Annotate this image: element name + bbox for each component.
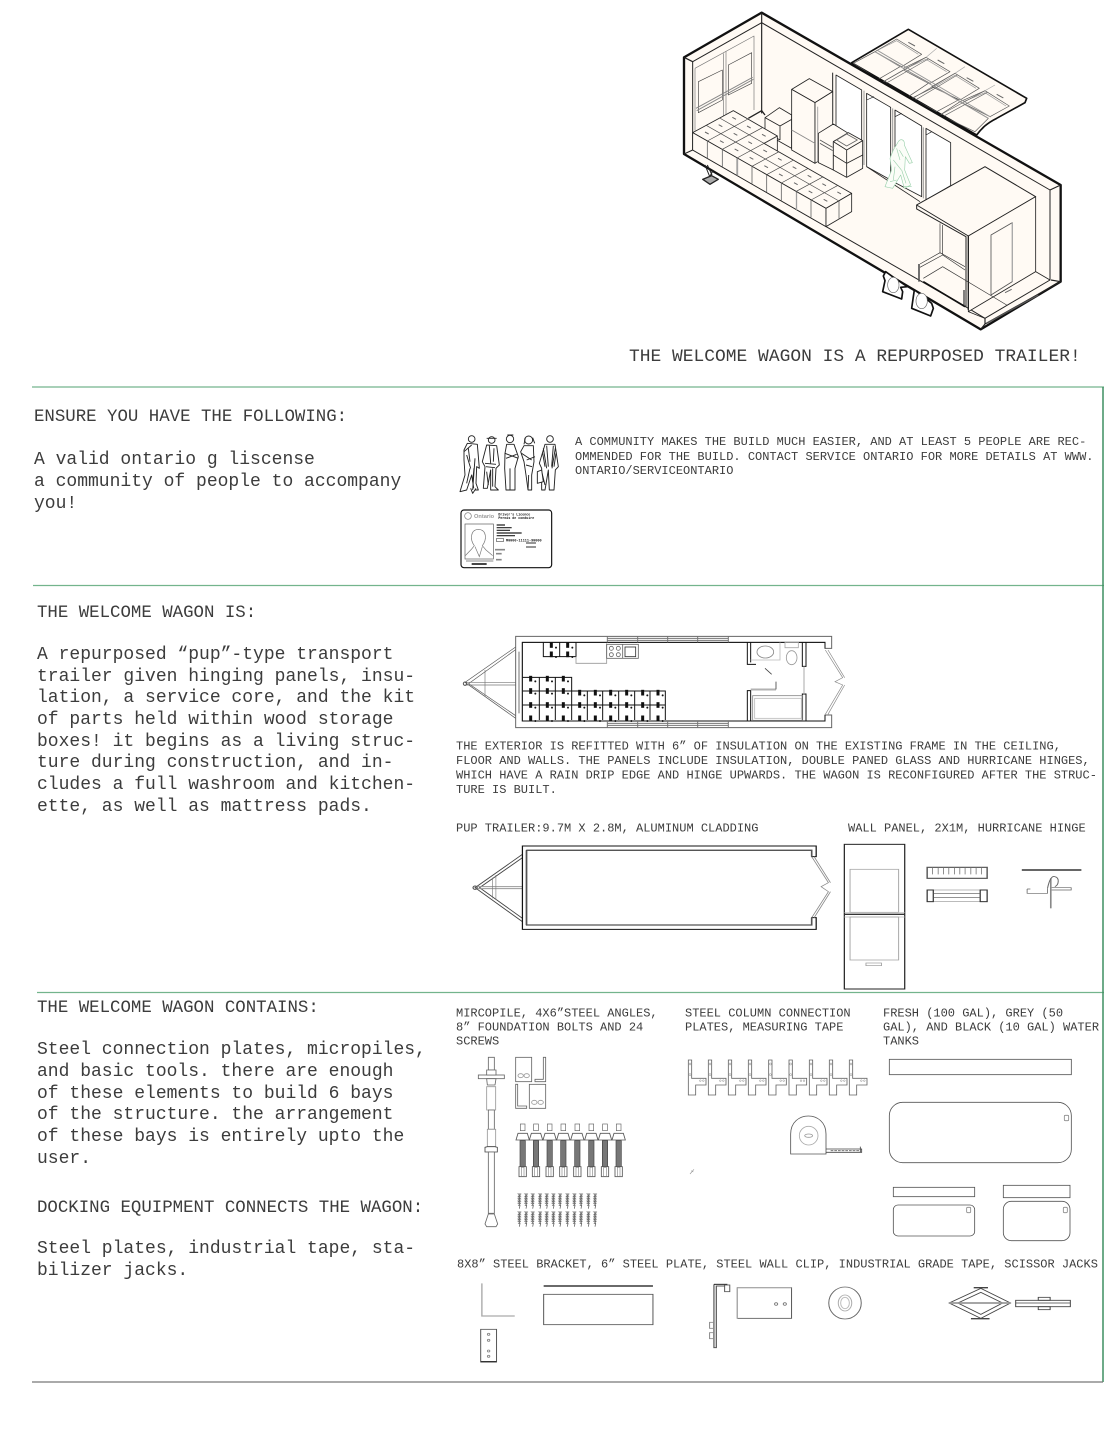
text block: docking: Steel plates, industrial tape, sta-: [37, 1239, 415, 1259]
panel: the welcome wagon contains: [37, 999, 1099, 1362]
fridge: [748, 79, 833, 163]
stove and sink: [607, 644, 638, 658]
text block: exterior: [456, 740, 1097, 797]
text block: docking: [37, 1239, 415, 1281]
drawing: micropile: [478, 1057, 504, 1227]
text block: exterior: THE EXTERIOR IS REFITTED WITH 6” OF INSULATION ON THE EXISTING FRAME IN THE CEILING,: [456, 740, 1061, 754]
illustration: ontario licence card: M0000-11111-90000: [506, 539, 542, 543]
caption: micropile: [456, 1006, 658, 1048]
text block: community note: OMMENDED FOR THE BUILD. CONTACT SERVICE ONTARIO FOR MORE DETAILS AT WWW.: [575, 450, 1093, 464]
text block: community note: [575, 435, 1093, 478]
text block: requirements: you!: [34, 494, 77, 514]
text block: requirements: [34, 450, 401, 514]
text block: exterior: WHICH HAVE A RAIN DRIP EDGE AND HINGE UPWARDS. THE WAGON IS RECONFIGURED AFTER THE STRUC-: [456, 768, 1097, 782]
text block: description: [37, 645, 415, 817]
caption: water tanks: FRESH (100 GAL), GREY (50: [883, 1006, 1063, 1020]
caption: micropile: SCREWS: [456, 1034, 499, 1048]
caption: column plates: STEEL COLUMN CONNECTION: [685, 1006, 851, 1020]
drawing: column connection plates: [688, 1060, 867, 1095]
drawing: hurricane hinge: [1022, 870, 1081, 908]
illustration: ontario licence card: Ontario: [474, 514, 495, 520]
hinged doors: [825, 650, 845, 714]
kitchen boxes: [543, 642, 576, 657]
text block: description: of parts held within wood storage: [37, 710, 393, 730]
drawing: wall panel: [844, 844, 905, 989]
illustration: ontario licence card: Driver's Licence: [498, 512, 530, 516]
text block: exterior: TURE IS BUILT.: [456, 783, 557, 797]
drawing: panel section: [927, 867, 987, 902]
text block: description: ette, as well as mattress pads.: [37, 797, 372, 817]
hitch: [463, 647, 516, 718]
illustration: ontario licence card: [461, 510, 552, 568]
text block: community note: ONTARIO/SERVICEONTARIO: [575, 464, 733, 478]
caption: wall panel: WALL PANEL, 2X1M, HURRICANE HINGE: [848, 822, 1086, 836]
drawing: pup trailer plan: [473, 846, 830, 929]
drawing: water tanks: [889, 1059, 1071, 1241]
caption: water tanks: [883, 1006, 1099, 1048]
isometric drawing: welcome wagon cutaway: [684, 13, 1061, 329]
caption: micropile: MIRCOPILE, 4X6”STEEL ANGLES,: [456, 1006, 658, 1020]
text block: contents: of these elements to build 6 bays: [37, 1084, 393, 1104]
caption: pup trailer: PUP TRAILER:9.7M X 2.8M, ALUMINUM CLADDING: [456, 822, 758, 836]
text block: requirements: A valid ontario g liscense: [34, 450, 315, 470]
drawing: foundation bolts: [516, 1124, 625, 1177]
caption: micropile: 8” FOUNDATION BOLTS AND 24: [456, 1020, 643, 1034]
washroom: [747, 642, 806, 721]
text block: contents: and basic tools. there are enough: [37, 1062, 393, 1082]
back wall window openings: [833, 73, 951, 202]
drawing: industrial tape: [829, 1287, 861, 1319]
divider lines and frame: [32, 387, 1104, 1382]
text block: contents: of the structure. the arrangement: [37, 1105, 393, 1125]
storage boxes: [693, 111, 852, 227]
wet core box: [917, 167, 1050, 318]
text block: requirements: a community of people to accompany: [34, 472, 401, 492]
text block: docking: bilizer jacks.: [37, 1261, 188, 1281]
end wall window: [695, 36, 754, 131]
storage box grid: [523, 676, 665, 721]
kitchen counter and sink: [818, 124, 863, 177]
text block: exterior: FLOOR AND WALLS. THE PANELS INCLUDE INSULATION, DOUBLE PANED GLASS AND HURRICANE HINGES,: [456, 754, 1090, 768]
caption: column plates: [685, 1006, 851, 1034]
heading: welcome wagon is: THE WELCOME WAGON IS:: [37, 604, 256, 623]
caption: water tanks: TANKS: [883, 1034, 919, 1048]
floor plan of the wagon: [463, 636, 845, 728]
text block: contents: Steel connection plates, micropiles,: [37, 1040, 426, 1060]
text block: description: lation, a service core, and the kit: [37, 688, 415, 708]
trailer wheels: [883, 272, 933, 316]
caption: docking parts: 8X8” STEEL BRACKET, 6” STEEL PLATE, STEEL WALL CLIP, INDUSTRIAL GRADE TAPE, SCISSOR JACKS: [457, 1258, 1098, 1272]
heading: ensure: ENSURE YOU HAVE THE FOLLOWING:: [34, 408, 347, 427]
text block: description: cludes a full washroom and kitchen-: [37, 775, 415, 795]
text block: description: ture during construction, and in-: [37, 753, 393, 773]
text block: contents: [37, 1040, 426, 1169]
text block: description: boxes! it begins as a living struc-: [37, 732, 415, 752]
walking person: [885, 140, 912, 188]
text block: contents: user.: [37, 1149, 91, 1169]
text block: description: A repurposed “pup”-type transport: [37, 645, 393, 665]
illustration: ontario licence card: Permis de conduire: [498, 516, 534, 520]
text block: community note: A COMMUNITY MAKES THE BUILD MUCH EASIER, AND AT LEAST 5 PEOPLE ARE REC-: [575, 435, 1086, 449]
wagon body shell: [684, 13, 1061, 329]
drawing: measuring tape: [690, 1116, 862, 1174]
drawing: steel bracket: [481, 1283, 515, 1362]
heading: contains: THE WELCOME WAGON CONTAINS:: [37, 999, 319, 1018]
panel: ensure you have: [34, 408, 1093, 568]
caption: water tanks: GAL), AND BLACK (10 GAL) WATER: [883, 1020, 1099, 1034]
drawing: scissor jacks: [949, 1288, 1070, 1319]
heading: docking equipment: DOCKING EQUIPMENT CONNECTS THE WAGON:: [37, 1199, 423, 1218]
panel: the welcome wagon is: [37, 604, 1097, 989]
wall panels behind the wagon: [852, 29, 1027, 135]
caption: column plates: PLATES, MEASURING TAPE: [685, 1020, 843, 1034]
hitch jack: [703, 165, 718, 184]
caption: welcome wagon: THE WELCOME WAGON IS A REPURPOSED TRAILER!: [629, 347, 1081, 367]
text block: contents: of these bays is entirely upto the: [37, 1127, 404, 1147]
drawing: steel plate: [544, 1286, 653, 1325]
drawing: steel angles: [516, 1057, 546, 1108]
drawing: wall clip: [710, 1284, 792, 1348]
drawing: screws: [517, 1193, 597, 1227]
text block: description: trailer given hinging panels, insu-: [37, 667, 415, 687]
illustration: group of people: [460, 435, 558, 493]
